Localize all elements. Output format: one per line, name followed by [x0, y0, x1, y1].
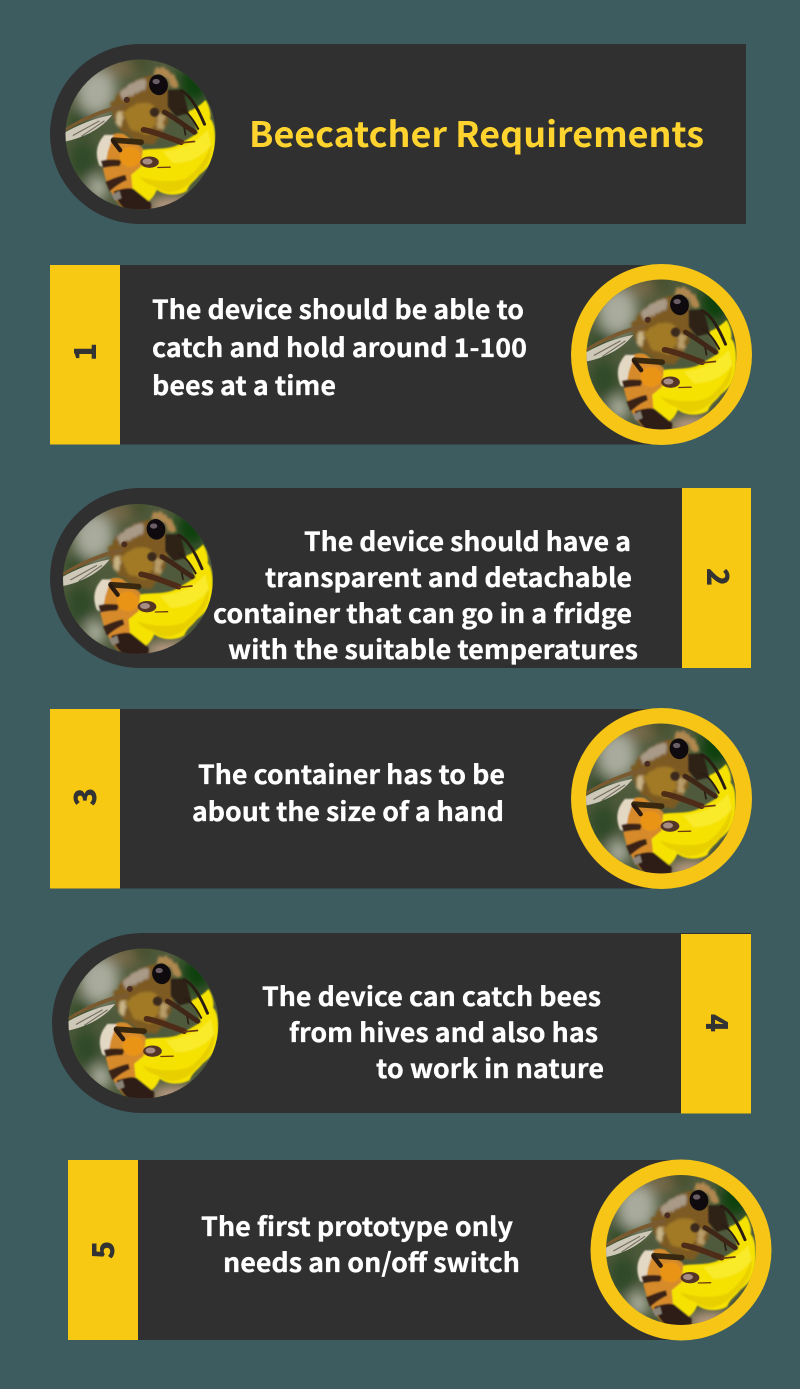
number 1: 1	[61, 343, 105, 361]
bar	[50, 265, 662, 444]
header bar	[50, 44, 746, 224]
bar	[68, 1160, 682, 1340]
text block: The device should have a	[304, 522, 631, 559]
title: Beecatcher Requirements	[249, 107, 704, 158]
number tab	[50, 709, 120, 888]
icon: bee photo	[63, 501, 213, 660]
number tab	[50, 265, 120, 444]
icon: bee photo in yellow ring	[571, 264, 752, 445]
icon: bee photo in yellow ring	[590, 1160, 772, 1340]
number tab	[681, 934, 751, 1114]
text block	[213, 522, 638, 667]
text block: The first prototype only	[201, 1207, 513, 1244]
icon: bee photo in yellow ring	[571, 708, 752, 889]
text block: The container has to be	[198, 755, 505, 792]
panel: requirement 4	[52, 933, 751, 1114]
panel: requirement 3	[50, 708, 752, 889]
number tab	[68, 1160, 138, 1340]
text block: bees at a time	[152, 366, 336, 403]
number 2: 2	[698, 568, 742, 586]
text block	[262, 977, 604, 1086]
text block: transparent and detachable	[265, 558, 632, 595]
number 4: 4	[697, 1014, 741, 1032]
panel: requirement 5	[68, 1160, 772, 1340]
icon: bee photo	[66, 56, 216, 216]
text block: container that can go in a fridge	[213, 594, 632, 631]
panel: requirement 2	[50, 488, 751, 668]
text block: catch and hold around 1-100	[152, 328, 527, 365]
bar	[50, 488, 751, 668]
text block	[192, 755, 505, 829]
number tab	[682, 488, 751, 668]
text block: The device can catch bees	[262, 977, 601, 1014]
text block: to work in nature	[376, 1049, 604, 1086]
text block	[152, 290, 527, 403]
text block: needs an on/off switch	[223, 1243, 520, 1280]
bar	[52, 933, 751, 1113]
text block	[201, 1207, 520, 1280]
number 5: 5	[79, 1241, 123, 1259]
header panel	[50, 44, 746, 224]
text block: from hives and also has	[289, 1013, 598, 1050]
panel: requirement 1	[50, 264, 752, 445]
text block: with the suitable temperatures	[228, 630, 638, 667]
icon: bee photo	[68, 946, 218, 1105]
text block: The device should be able to	[152, 290, 524, 327]
bar	[50, 709, 662, 888]
number 3: 3	[61, 788, 105, 806]
text block: about the size of a hand	[192, 792, 504, 829]
